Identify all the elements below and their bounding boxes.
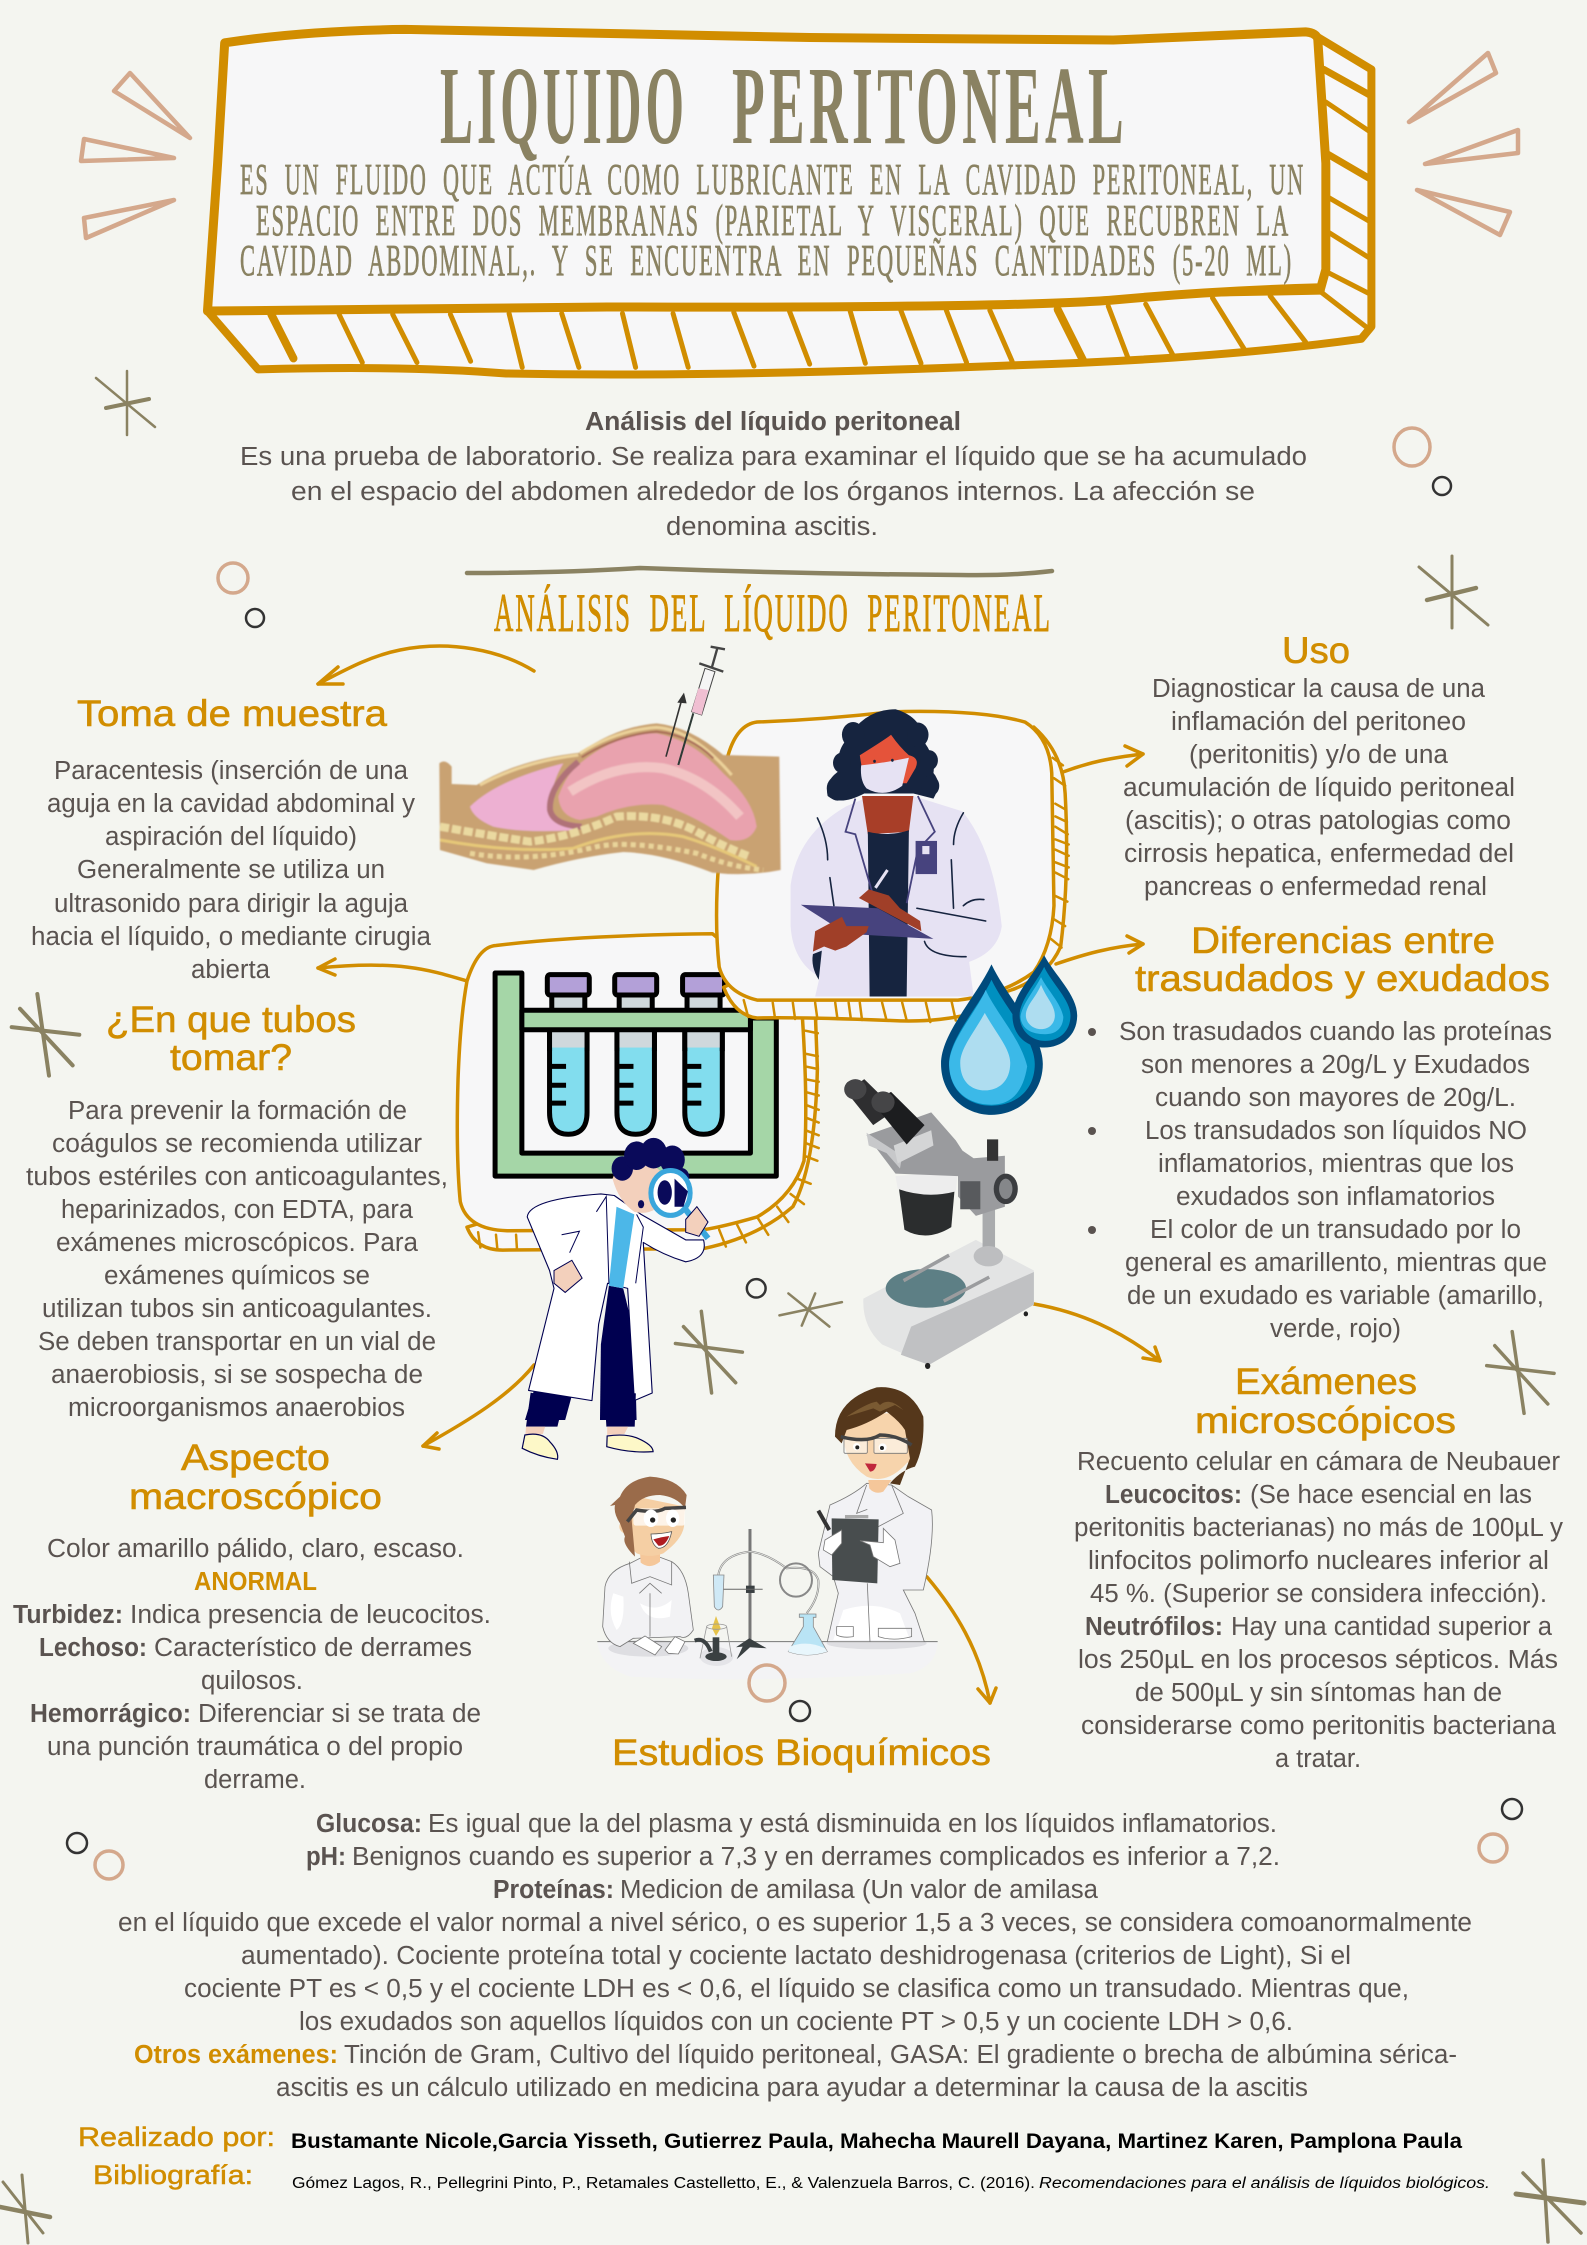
- circles left of section heading: [218, 563, 264, 627]
- female student: [818, 1387, 932, 1642]
- text: examenes microscopicos: los 250µL en los procesos sépticos. Más: [1078, 1646, 1558, 1674]
- illustration: scientist with magnifier: [525, 1138, 708, 1420]
- text: en que tubos tomar: exámenes químicos se: [104, 1262, 370, 1290]
- text: estudios bioquimicos: cociente PT es < 0,5 y el cociente LDH es < 0,6, el líquido se clasifica como un transudado. Mientras que,: [184, 1975, 1409, 2003]
- text: uso: acumulación de líquido peritoneal: [1123, 774, 1515, 802]
- star bottom right: [1516, 2160, 1584, 2242]
- text: aspecto macroscopico: quilosos.: [201, 1667, 303, 1695]
- section heading: ANÁLISIS DEL LÍQUIDO PERITONEAL: [494, 583, 1052, 643]
- text: toma de muestra: aguja en la cavidad abdominal y: [47, 790, 415, 818]
- intro text: Es una prueba de laboratorio. Se realiza para examinar el líquido que se ha acumulado: [240, 443, 1307, 471]
- text: examenes microscopicos: Hay una cantidad superior a: [1231, 1613, 1553, 1641]
- text: diferencias: El color de un transudado por lo: [1150, 1216, 1521, 1244]
- intro text: [240, 408, 1307, 541]
- arrow to toma de muestra: [318, 646, 534, 684]
- heading: aspecto macroscopico: macroscópico: [129, 1476, 382, 1517]
- heading: examenes microscopicos: Exámenes: [1235, 1361, 1417, 1402]
- boy student: [603, 1477, 693, 1655]
- credits: bibliografia: Recomendaciones para el análisis de líquidos biológicos.: [1039, 2175, 1490, 2192]
- text: examenes microscopicos: (Se hace esencial en las: [1250, 1481, 1532, 1509]
- heading: estudios bioquimicos: Estudios Bioquímicos: [612, 1732, 991, 1773]
- text: toma de muestra: Paracentesis (inserción de una: [54, 757, 409, 785]
- circles bottom right: [1479, 1799, 1522, 1862]
- heading: diferencias: trasudados y exudados: [1135, 958, 1550, 999]
- text: examenes microscopicos: Recuento celular en cámara de Neubauer: [1077, 1448, 1561, 1476]
- text: aspecto macroscopico: Lechoso:: [39, 1634, 147, 1662]
- text: aspecto macroscopico: Color amarillo pálido, claro, escaso.: [47, 1535, 464, 1563]
- star top right: [1419, 556, 1488, 628]
- arrow to examenes: [1034, 1304, 1160, 1361]
- icon: test tube rack: [495, 973, 776, 1176]
- text: diferencias: verde, rojo): [1270, 1315, 1401, 1343]
- text: diferencias: exudados son inflamatorios: [1176, 1183, 1495, 1211]
- heading: en que tubos tomar: [106, 999, 356, 1078]
- text: en que tubos tomar: coágulos se recomienda utilizar: [52, 1130, 423, 1158]
- text: diferencias: inflamatorios, mientras que los: [1158, 1150, 1514, 1178]
- text: aspecto macroscopico: [13, 1535, 491, 1794]
- text: estudios bioquimicos: Medicion de amilasa (Un valor de amilasa: [620, 1876, 1099, 1904]
- intro text: denomina ascitis.: [666, 513, 878, 541]
- text: toma de muestra: hacia el líquido, o mediante cirugia: [31, 923, 432, 951]
- text: en que tubos tomar: utilizan tubos sin anticoagulantes.: [42, 1295, 432, 1323]
- text: aspecto macroscopico: Indica presencia de leucocitos.: [130, 1601, 491, 1629]
- credits: bibliografia: Bibliografía:: [93, 2160, 253, 2190]
- heading: en que tubos tomar: tomar?: [170, 1037, 292, 1078]
- credits: realizado por: [78, 2122, 1463, 2153]
- credits: realizado por: Bustamante Nicole,Garcia Yisseth, Gutierrez Paula, Mahecha Maurell Dayana, Martinez Karen, Pamplona Paula: [291, 2129, 1463, 2153]
- text: en que tubos tomar: [26, 1097, 448, 1422]
- text: diferencias: son menores a 20g/L y Exudados: [1141, 1051, 1530, 1079]
- illustration: female doctor: [791, 709, 1002, 997]
- text: examenes microscopicos: a tratar.: [1275, 1745, 1361, 1773]
- text: estudios bioquimicos: en el líquido que excede el valor normal a nivel sérico, o es superior 1,5 a 3 veces, se considera comoanormalmente: [118, 1909, 1472, 1937]
- text: estudios bioquimicos: Benignos cuando es superior a 7,3 y en derrames complicados es inferior a 7,2.: [352, 1843, 1280, 1871]
- text: diferencias: cuando son mayores de 20g/L.: [1155, 1084, 1516, 1112]
- heading: aspecto macroscopico: Aspecto: [181, 1437, 330, 1478]
- section divider: [467, 568, 1052, 575]
- heading: examenes microscopicos: [1195, 1361, 1456, 1441]
- text: aspecto macroscopico: una punción traumática o del propio: [47, 1733, 463, 1761]
- text: en que tubos tomar: Para prevenir la formación de: [68, 1097, 407, 1125]
- text: diferencias: [1088, 1018, 1552, 1343]
- decorative triangles right: [1409, 53, 1518, 235]
- illustration: abdomen cross-section with syringe: [439, 647, 781, 874]
- text: examenes microscopicos: linfocitos polimorfo nucleares inferior al: [1088, 1547, 1549, 1575]
- text: toma de muestra: aspiración del líquido): [105, 823, 357, 851]
- text: en que tubos tomar: heparinizados, con EDTA, para: [61, 1196, 414, 1224]
- arrow to aspecto: [423, 1365, 534, 1449]
- icon: water drops: [941, 955, 1077, 1115]
- text: estudios bioquimicos: los exudados son aquellos líquidos con un cociente PT > 0,5 y un cociente LDH > 0,6.: [299, 2008, 1293, 2036]
- star left: [12, 994, 79, 1076]
- text: en que tubos tomar: Se deben transportar en un vial de: [38, 1328, 436, 1356]
- subtitle: [240, 155, 1305, 285]
- text: toma de muestra: ultrasonido para dirigir la aguja: [54, 890, 409, 918]
- credits: bibliografia: [93, 2160, 1490, 2192]
- text: estudios bioquimicos: Proteínas:: [493, 1876, 614, 1904]
- decorative small circle and stars center: [675, 1279, 842, 1393]
- scientist legs and shoes: [522, 1390, 653, 1459]
- text: aspecto macroscopico: Turbidez:: [13, 1601, 123, 1629]
- text: diferencias: general es amarillento, mientras que: [1125, 1249, 1547, 1277]
- arrow to estudios: [927, 1577, 996, 1703]
- title: LIQUIDO: [440, 45, 688, 168]
- arrow to uso: [1063, 746, 1143, 772]
- heading: uso: Uso: [1282, 630, 1350, 671]
- star bottom left: [0, 2175, 50, 2243]
- text: estudios bioquimicos: Es igual que la del plasma y está disminuida en los líquidos inflamatorios.: [428, 1810, 1277, 1838]
- text: toma de muestra: abierta: [191, 956, 271, 984]
- text: estudios bioquimicos: Glucosa:: [316, 1810, 422, 1838]
- intro text: Análisis del líquido peritoneal: [585, 408, 961, 436]
- illustration: two students with lab bench: [597, 1387, 938, 1679]
- circles bottom left: [67, 1833, 123, 1879]
- text: diferencias: Los transudados son líquidos NO: [1145, 1117, 1527, 1145]
- heading: aspecto macroscopico: [129, 1437, 382, 1517]
- heading: diferencias: [1135, 920, 1550, 999]
- credits: bibliografia: Gómez Lagos, R., Pellegrini Pinto, P., Retamales Castelletto, E., & Valenzuela Barros, C. (2016).: [292, 2175, 1035, 2192]
- illustration: microscope: [844, 1079, 1034, 1369]
- heading: diferencias: Diferencias entre: [1191, 920, 1495, 961]
- text: aspecto macroscopico: ANORMAL: [194, 1568, 317, 1596]
- text: uso: cirrosis hepatica, enfermedad del: [1124, 840, 1514, 868]
- text: diferencias: de un exudado es variable (amarillo,: [1127, 1282, 1544, 1310]
- text: examenes microscopicos: peritonitis bacterianas) no más de 100µL y: [1074, 1514, 1563, 1542]
- text: uso: (peritonitis) y/o de una: [1189, 741, 1449, 769]
- text: en que tubos tomar: exámenes microscópicos. Para: [56, 1229, 419, 1257]
- heading: en que tubos tomar: ¿En que tubos: [106, 999, 356, 1040]
- circles near estudios: [749, 1665, 810, 1721]
- panel: test tubes box: [457, 934, 819, 1250]
- text: estudios bioquimicos: Tinción de Gram, Cultivo del líquido peritoneal, GASA: El gradiente o brecha de albúmina sérica-: [344, 2041, 1457, 2069]
- text: aspecto macroscopico: Diferenciar si se trata de: [198, 1700, 481, 1728]
- text: en que tubos tomar: anaerobiosis, si se sospecha de: [51, 1361, 423, 1389]
- credits: realizado por: Realizado por:: [78, 2122, 275, 2152]
- text: PERITONEAL: [732, 45, 1128, 168]
- text: uso: pancreas o enfermedad renal: [1144, 873, 1487, 901]
- text: examenes microscopicos: Leucocitos:: [1105, 1481, 1242, 1509]
- text: estudios bioquimicos: Otros exámenes:: [134, 2041, 338, 2069]
- text: uso: inflamación del peritoneo: [1171, 708, 1466, 736]
- text: en que tubos tomar: microorganismos anaerobios: [68, 1394, 405, 1422]
- banner box: [207, 29, 1371, 375]
- text: estudios bioquimicos: aumentado). Cociente proteína total y cociente lactato deshidrogenasa (criterios de Light), Si el: [241, 1942, 1351, 1970]
- heading: examenes microscopicos: microscópicos: [1195, 1400, 1456, 1441]
- text: aspecto macroscopico: derrame.: [204, 1766, 306, 1794]
- text: toma de muestra: [31, 757, 432, 984]
- decorative triangles left: [81, 73, 190, 238]
- text: estudios bioquimicos: ascitis es un cálculo utilizado en medicina para ayudar a determinar la causa de la ascitis: [276, 2074, 1308, 2102]
- text: diferencias: Son trasudados cuando las proteínas: [1119, 1018, 1552, 1046]
- text: toma de muestra: Generalmente se utiliza un: [77, 856, 385, 884]
- lab apparatus: [695, 1529, 827, 1661]
- text: en que tubos tomar: tubos estériles con anticoagulantes,: [26, 1163, 448, 1191]
- text: uso: (ascitis); o otras patologias como: [1125, 807, 1511, 835]
- panel: doctor box: [717, 711, 1069, 1022]
- text: uso: [1123, 675, 1515, 901]
- arrow to tubos: [318, 959, 467, 981]
- arrow to diferencias: [1056, 936, 1143, 964]
- text: examenes microscopicos: considerarse como peritonitis bacteriana: [1081, 1712, 1557, 1740]
- text: examenes microscopicos: 45 %. (Superior se considera infección).: [1090, 1580, 1547, 1608]
- star right: [1487, 1332, 1554, 1413]
- text: estudios bioquimicos: [118, 1810, 1472, 2102]
- star top left: [96, 371, 155, 435]
- text: estudios bioquimicos: pH:: [306, 1843, 346, 1871]
- text: examenes microscopicos: [1074, 1448, 1563, 1773]
- text: aspecto macroscopico: Característico de derrames: [154, 1634, 472, 1662]
- text: aspecto macroscopico: Hemorrágico:: [30, 1700, 191, 1728]
- text: examenes microscopicos: de 500µL y sin síntomas han de: [1135, 1679, 1502, 1707]
- intro text: en el espacio del abdomen alrededor de los órganos internos. La afección se: [291, 478, 1255, 506]
- heading: toma de muestra: Toma de muestra: [77, 693, 387, 734]
- text: uso: Diagnosticar la causa de una: [1152, 675, 1486, 703]
- text: examenes microscopicos: Neutrófilos:: [1085, 1613, 1223, 1641]
- circles top right: [1394, 428, 1451, 495]
